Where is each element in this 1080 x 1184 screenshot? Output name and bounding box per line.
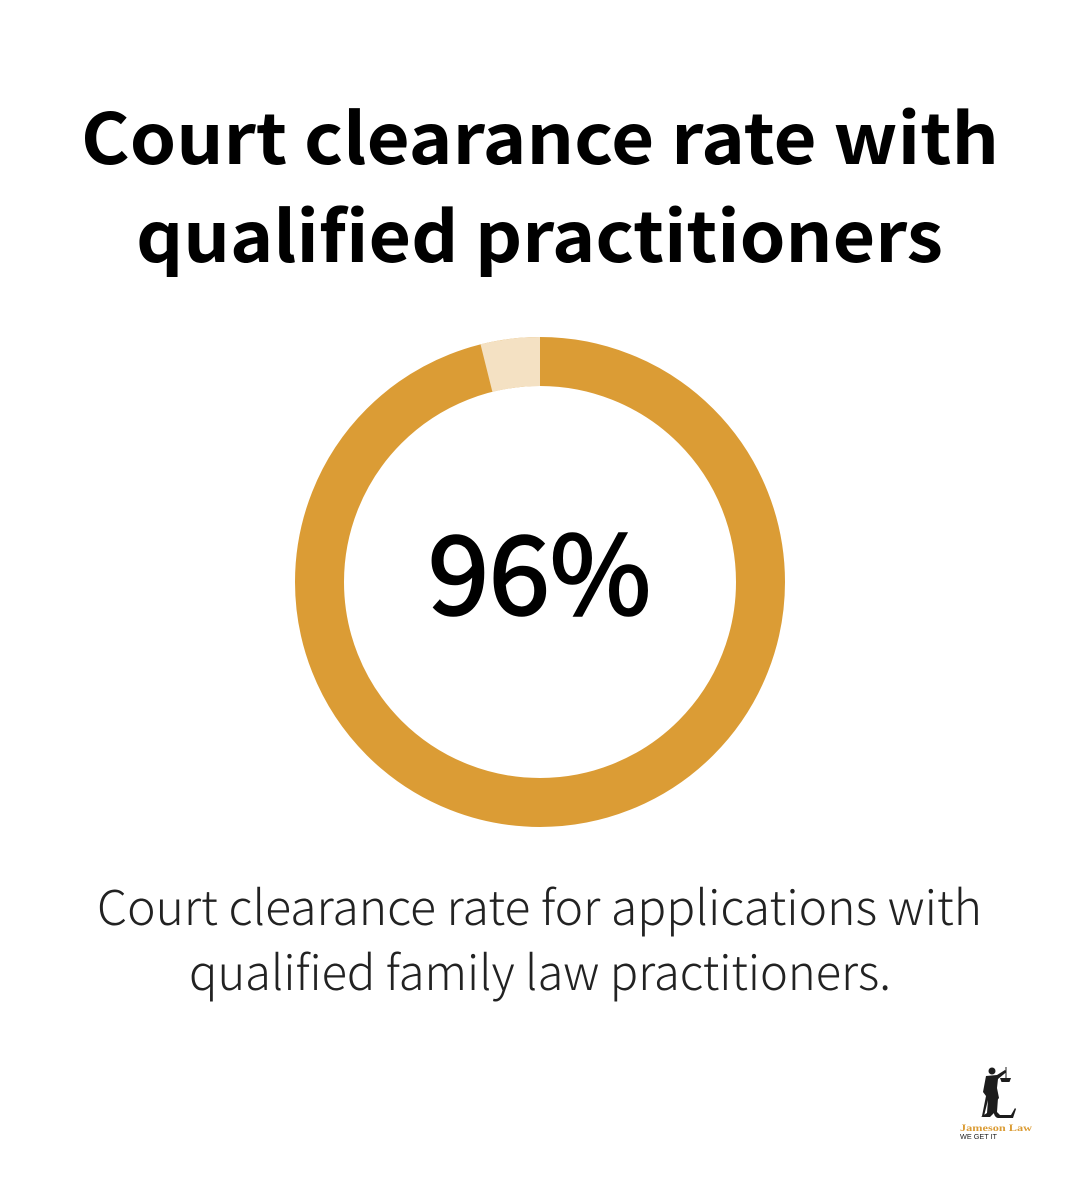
description text: Court clearance rate for applications with: [97, 869, 982, 939]
logo: Jameson Law: [960, 1067, 1032, 1141]
title: qualified practitioners: [136, 182, 943, 283]
donut chart: 96%: [320, 337, 760, 802]
remaining 4% segment: [480, 337, 540, 392]
description text: [97, 869, 982, 1004]
icon: lady justice: [981, 1067, 1016, 1118]
title: [81, 84, 999, 283]
logo: Jameson Law: WE GET IT: [960, 1134, 998, 1141]
logo: Jameson Law: Jameson Law: [960, 1124, 1032, 1134]
value: 96%: 96%: [428, 490, 651, 646]
title: Court clearance rate with: [81, 84, 999, 185]
description text: qualified family law practitioners.: [189, 934, 891, 1004]
